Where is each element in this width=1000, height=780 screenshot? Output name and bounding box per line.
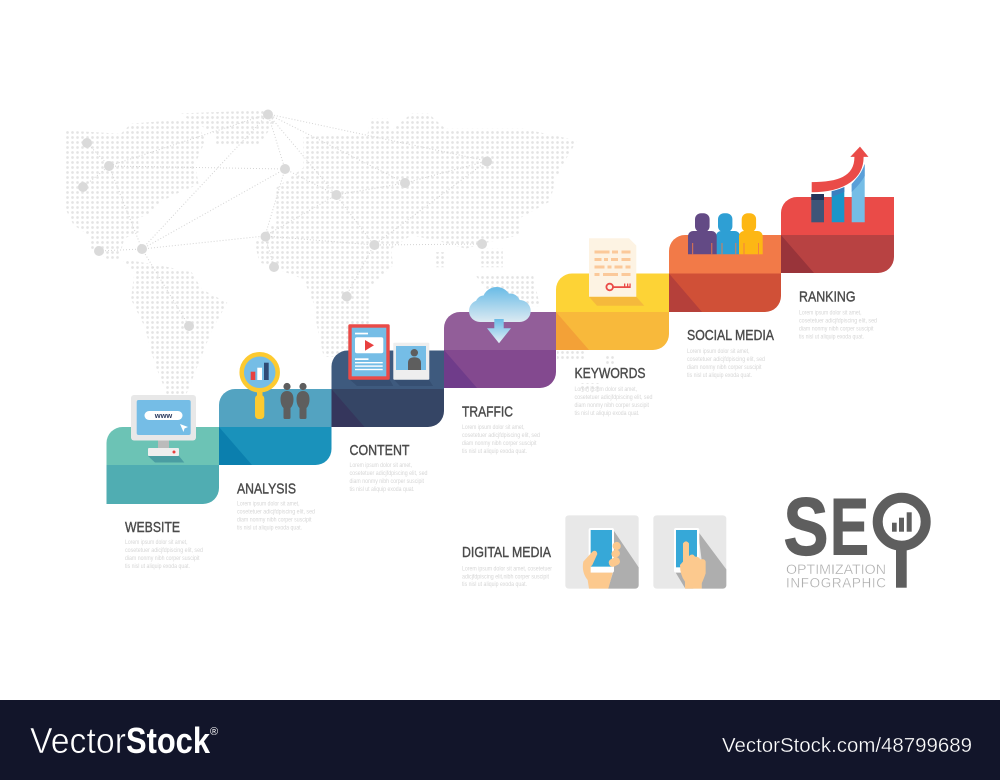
footer logo: Vector — [30, 720, 126, 761]
text: social media: diam nonmy nibh corper suscipit — [687, 365, 762, 371]
text: social media: SOCIAL MEDIA — [687, 328, 774, 344]
icon: computer monitor: www — [154, 411, 172, 420]
icon: growth chart with arrow — [811, 146, 869, 222]
text: website: diam nonmy nibh corper suscipit — [125, 556, 200, 562]
text: keywords: diam nonmy nibh corper suscipit — [574, 403, 649, 409]
text: digital media: Lorem ipsum dolor sit amet, cosetetuer — [462, 566, 552, 572]
panel: traffic step — [444, 287, 556, 388]
text: analysis: ANALYSIS — [237, 482, 296, 498]
icon: two people — [280, 383, 310, 419]
text: digital media: tis nisl ut aliquip exoda quat. — [462, 582, 527, 588]
logo: SEO optimization infographic — [784, 482, 926, 591]
text: content: diam nonmy nibh corper suscipit — [350, 479, 424, 485]
icon: three people — [688, 213, 763, 254]
text: traffic: cosetetuer adicjfdpiscing elit, sed — [462, 433, 540, 439]
text: keywords — [574, 366, 652, 417]
text: website: cosetetuer adicjfdpiscing elit, sed — [125, 548, 203, 554]
text: social media: tis nisl ut aliquip exoda quat. — [687, 373, 752, 379]
text: keywords: Lorem ipsum dolor sit amet, — [574, 387, 637, 393]
text: website — [125, 520, 203, 570]
text: analysis — [237, 482, 315, 532]
text: ranking — [799, 290, 877, 340]
text: website: Lorem ipsum dolor sit amet, — [125, 540, 188, 546]
icon: tablet with video — [348, 324, 393, 386]
text: ranking: tis nisl ut aliquip exoda quat. — [799, 334, 864, 340]
text: content: tis nisl ut aliquip exoda quat. — [350, 487, 415, 493]
text: website: WEBSITE — [125, 520, 180, 536]
text: analysis: cosetetuer adicjfdpiscing elit, sed — [237, 510, 315, 516]
text: ranking: RANKING — [799, 290, 856, 306]
text: traffic: diam nonmy nibh corper suscipit — [462, 441, 537, 447]
text: ranking: diam nonmy nibh corper suscipit — [799, 326, 874, 332]
text: content: CONTENT — [350, 443, 410, 459]
text: social media: cosetetuer adicjfdpiscing elit, sed — [687, 357, 765, 363]
text: website: tis nisl ut aliquip exoda quat. — [125, 564, 190, 570]
footer url: VectorStock.com/48799689 — [722, 735, 972, 757]
text: analysis: tis nisl ut aliquip exoda quat. — [237, 526, 302, 532]
text: content — [350, 443, 428, 493]
icon: hand holding phone — [565, 515, 639, 589]
panel: content step — [332, 324, 444, 427]
footer bar — [0, 700, 1000, 780]
footer logo: Stock — [126, 720, 211, 761]
world map with network — [60, 100, 620, 400]
text: traffic: Lorem ipsum dolor sit amet, — [462, 425, 525, 431]
text: digital media: DIGITAL MEDIA — [462, 545, 551, 561]
text: keywords: tis nisl ut aliquip exoda quat. — [574, 411, 640, 417]
panel: analysis step — [219, 354, 332, 465]
text: ranking: cosetetuer adicjfdpiscing elit, sed — [799, 318, 877, 324]
text: traffic: TRAFFIC — [462, 404, 513, 420]
text: digital media: adicjfdpiscing elit,nibh corper suscipit — [462, 574, 549, 580]
footer logo: ® — [210, 726, 218, 738]
text: digital media — [462, 545, 552, 588]
logo: SEO optimization infographic: E — [830, 482, 869, 572]
text: keywords: cosetetuer adicjfdpiscing elit, sed — [574, 395, 652, 401]
text: content: cosetetuer adicjfdpiscing elit, sed — [350, 471, 428, 477]
text: content: Lorem ipsum dolor sit amet, — [350, 463, 412, 469]
text: keywords: KEYWORDS — [574, 366, 646, 382]
logo: SEO optimization infographic: S — [784, 482, 828, 572]
text: social media — [687, 328, 774, 379]
icon: profile photo — [393, 343, 433, 386]
text: traffic — [462, 404, 540, 455]
text: traffic: tis nisl ut aliquip exoda quat. — [462, 449, 527, 455]
text: social media: Lorem ipsum dolor sit amet, — [687, 349, 750, 355]
icon: finger tapping phone — [653, 515, 726, 589]
text: analysis: diam nonmy nibh corper suscipit — [237, 518, 312, 524]
panel: ranking step — [781, 146, 894, 273]
panel: website step — [106, 395, 219, 504]
text: analysis: Lorem ipsum dolor sit amet, — [237, 502, 300, 508]
panel: keywords step — [556, 238, 669, 350]
icon: cloud download — [469, 287, 531, 343]
text: ranking: Lorem ipsum dolor sit amet, — [799, 310, 862, 316]
icon: magnifier with chart — [242, 354, 278, 419]
logo: SEO optimization infographic: OPTIMIZATION — [786, 562, 886, 577]
footer logo — [30, 720, 218, 761]
panel: social media step — [669, 213, 781, 312]
icon: document with key — [589, 238, 644, 306]
logo: SEO optimization infographic: INFOGRAPHIC — [786, 576, 886, 591]
